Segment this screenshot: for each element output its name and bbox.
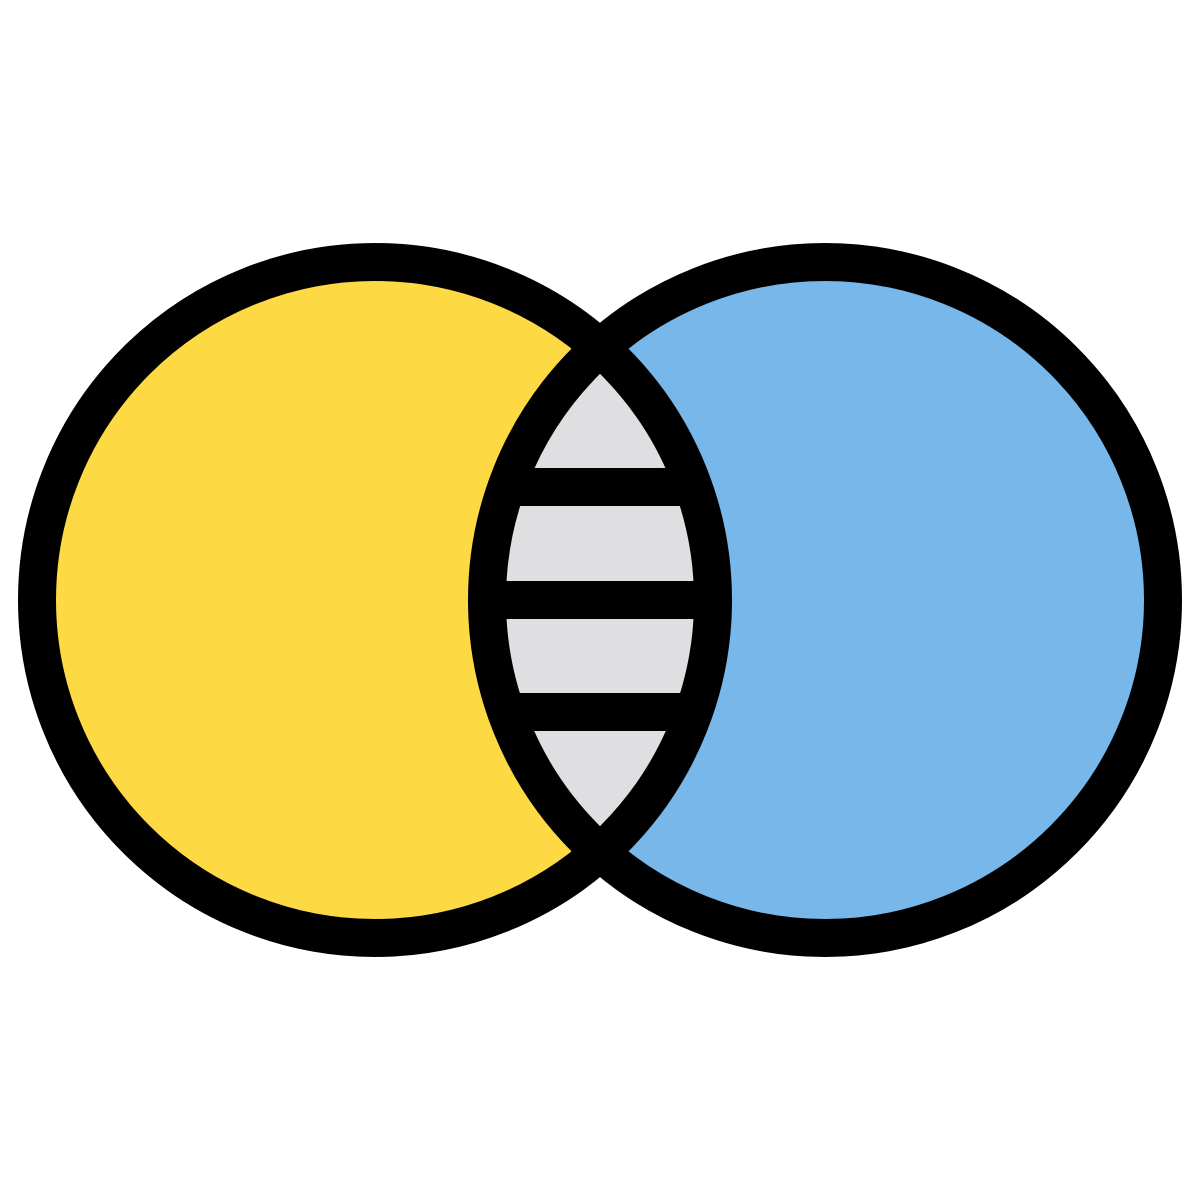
intersection lens with stripes <box>506 374 694 826</box>
venn diagram icon <box>18 243 1182 957</box>
circle outlines <box>37 262 1163 938</box>
circle: left yellow <box>37 262 713 938</box>
circle: right blue <box>487 262 1163 938</box>
